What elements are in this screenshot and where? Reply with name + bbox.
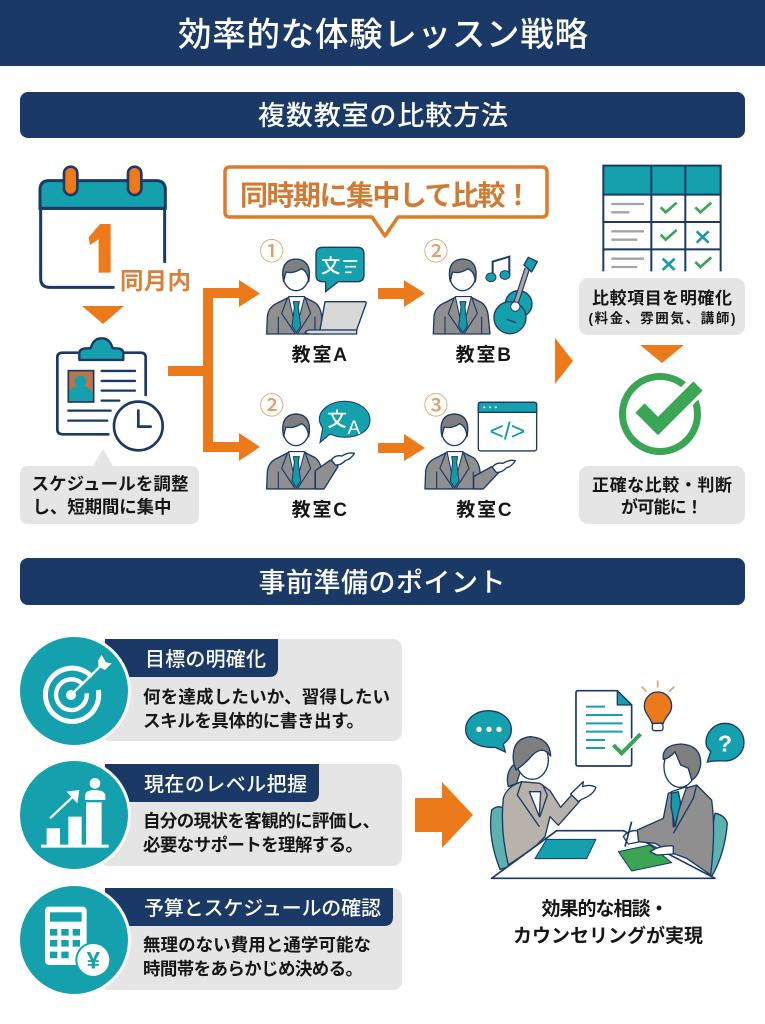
callout: accurate judgement — [579, 466, 745, 524]
chairs — [491, 807, 727, 877]
icon: green check — [622, 376, 698, 452]
label: same month: 同月内 — [120, 268, 191, 294]
speech bubble: dots — [466, 711, 511, 752]
caption: effective counseling — [513, 898, 703, 947]
icon: clipboard with clock — [57, 338, 163, 450]
callout: clarify comparison items — [579, 278, 745, 335]
classroom C: 文 — [327, 409, 347, 431]
counseling illustration — [466, 681, 744, 878]
arrow: to counseling — [415, 782, 473, 848]
callout: schedule adjustment: し、短期間に集中 — [32, 497, 172, 517]
document with check — [576, 691, 641, 766]
classroom C: ② — [259, 392, 284, 420]
point 3: budget: 無理のない費用と通学可能な — [143, 935, 371, 955]
branching arrow — [168, 280, 260, 461]
point 2: level: 自分の現状を客観的に評価し、 — [143, 811, 380, 831]
point 3: budget: ¥ — [87, 947, 101, 974]
section heading: preparation — [20, 558, 745, 605]
section heading: comparison: 複数教室の比較方法 — [258, 101, 508, 131]
classroom B: 教室B — [456, 344, 511, 366]
classroom A: ① — [259, 238, 284, 266]
section heading: comparison — [20, 92, 745, 138]
arrow: down to check — [640, 345, 684, 363]
section heading: preparation: 事前準備のポイント — [258, 568, 506, 598]
callout: accurate judgement: 正確な比較・判断 — [592, 476, 732, 495]
point 1: goal — [17, 634, 402, 748]
point 1: goal: スキルを具体的に書き出す。 — [143, 711, 364, 731]
arrow: C to C — [378, 434, 425, 461]
title banner: 効率的な体験レッスン戦略 — [178, 17, 588, 54]
point 2: level: 現在のレベル把握 — [144, 773, 307, 796]
classroom C second: 教室C — [456, 499, 512, 521]
callout: clarify comparison items: (料金、雰囲気、講師) — [588, 310, 736, 326]
point 3: budget: 時間帯をあらかじめ決める。 — [143, 959, 363, 979]
caption: effective counseling: 効果的な相談・ — [542, 898, 668, 920]
callout: schedule adjustment — [20, 449, 199, 524]
point 1: goal: 何を達成したいか、習得したい — [143, 687, 390, 707]
point 2: level — [17, 758, 402, 872]
classroom C second: </> — [489, 419, 525, 446]
classroom C: A — [348, 418, 361, 439]
caption: effective counseling: カウンセリングが実現 — [513, 924, 703, 947]
man — [623, 744, 714, 875]
classroom A: 教室A — [292, 344, 347, 366]
point 3: budget — [17, 883, 402, 997]
arrow: A to B — [378, 280, 425, 307]
classroom C: 教室C — [292, 499, 347, 521]
woman — [502, 737, 596, 865]
teal folder — [535, 839, 596, 859]
callout: concentrate comparison — [225, 167, 547, 236]
callout: clarify comparison items: 比較項目を明確化 — [592, 289, 732, 308]
classroom B — [424, 238, 537, 366]
point 3: budget: 予算とスケジュールの確認 — [144, 897, 381, 920]
table — [492, 831, 715, 878]
classroom A — [259, 238, 366, 366]
icon: calendar — [40, 167, 165, 287]
callout: accurate judgement: が可能に！ — [621, 497, 703, 517]
classroom C second — [424, 392, 537, 521]
callout: schedule adjustment: スケジュールを調整 — [32, 474, 188, 494]
title banner — [0, 0, 765, 66]
comparison table icon — [603, 166, 721, 271]
speech bubble: question — [706, 723, 744, 762]
classroom A: 文 — [321, 256, 340, 278]
arrow: calendar to schedule — [82, 306, 124, 324]
callout: concentrate comparison: 同時期に集中して比較！ — [240, 180, 532, 211]
speech bubble: question: ? — [718, 731, 732, 757]
classroom C — [259, 392, 370, 521]
classroom C second: ③ — [424, 392, 448, 420]
green folder — [618, 845, 672, 871]
point 2: level: 必要なサポートを理解する。 — [143, 835, 363, 855]
classroom B: ② — [424, 238, 448, 266]
point 1: goal: 目標の明確化 — [145, 648, 266, 671]
light bulb — [642, 681, 674, 731]
arrow: to results — [555, 338, 573, 384]
